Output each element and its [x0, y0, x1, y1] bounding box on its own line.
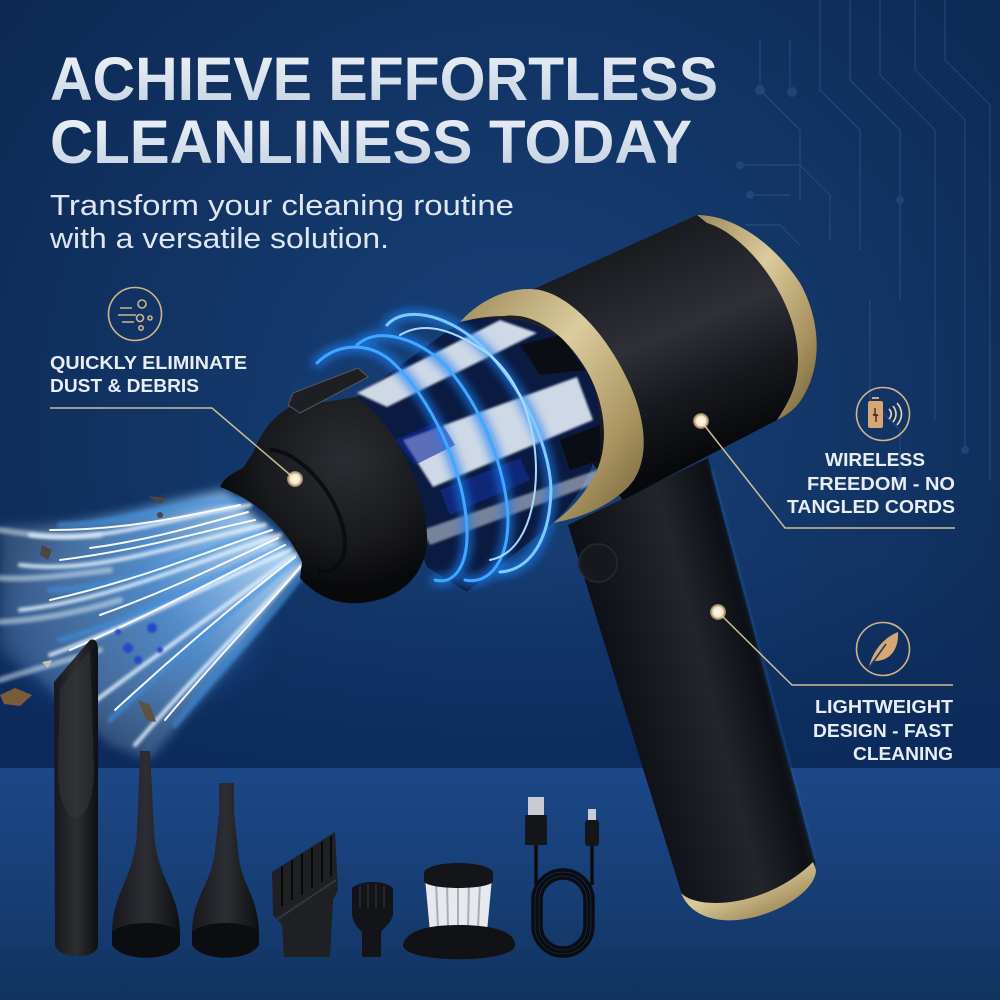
- icon: battery: [856, 388, 910, 440]
- subtitle: Transform your cleaning routine: [50, 190, 514, 222]
- vacuum device: [220, 215, 817, 920]
- callout: lightweight: CLEANING: [853, 744, 953, 764]
- circuit pattern: [736, 0, 990, 484]
- callout: wireless: FREEDOM - NO: [807, 474, 955, 494]
- accessories: [54, 639, 599, 959]
- blue energy rings: [317, 314, 551, 581]
- subtitle: with a versatile solution.: [49, 223, 389, 255]
- callout: dust and debris: [50, 288, 303, 487]
- power slide switch: [288, 368, 368, 413]
- callout: wireless: WIRELESS: [825, 450, 925, 470]
- title: [50, 45, 718, 176]
- callout: wireless: [693, 388, 955, 528]
- callout: lightweight: LIGHTWEIGHT: [815, 697, 953, 717]
- front gold ring: [460, 289, 644, 523]
- title: ACHIEVE EFFORTLESS: [50, 45, 718, 113]
- clear dust bin: [357, 318, 600, 592]
- flying debris: [0, 496, 168, 722]
- callout: dust and debris: DUST & DEBRIS: [50, 376, 199, 396]
- nozzle cap: [220, 397, 427, 603]
- tool: flat brush: [272, 832, 338, 957]
- callout: wireless: TANGLED CORDS: [787, 497, 955, 517]
- floor surface: [0, 768, 1000, 1000]
- icon: feather: [856, 622, 910, 676]
- callout: dust and debris: QUICKLY ELIMINATE: [50, 353, 247, 373]
- device head: [470, 215, 817, 500]
- device handle: [568, 458, 815, 918]
- tool: HEPA filter: [403, 863, 515, 959]
- icon: dust particles: [108, 288, 162, 340]
- tool: crevice nozzle: [54, 639, 98, 956]
- title: CLEANLINESS TODAY: [50, 108, 692, 176]
- tool: USB charging cable: [525, 797, 599, 956]
- subtitle: [49, 190, 514, 255]
- tool: narrow cone nozzle: [112, 751, 180, 958]
- callout: lightweight: [710, 604, 953, 764]
- tool: wide cone nozzle: [192, 783, 259, 958]
- tool: small round brush: [352, 882, 393, 957]
- air flow blast: [0, 490, 305, 760]
- callout: lightweight: DESIGN - FAST: [813, 721, 953, 741]
